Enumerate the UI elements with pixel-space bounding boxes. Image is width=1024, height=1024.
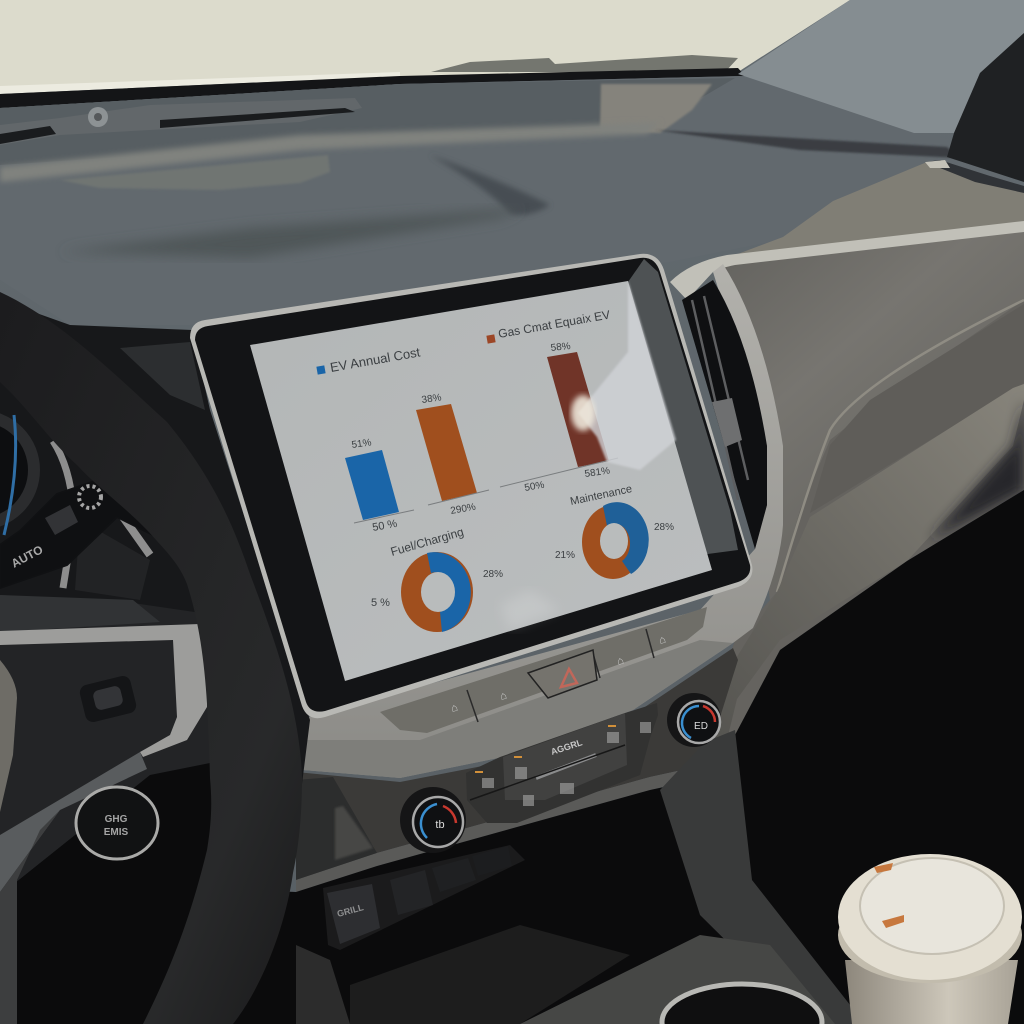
donut: fuel/charging: 28% [483, 569, 503, 580]
turn signal stalk: AUTO [9, 542, 45, 571]
donut: fuel/charging [371, 552, 503, 632]
start button: EMIS [104, 827, 129, 838]
screen buttons row: ⌂ [658, 634, 667, 647]
bar: orange: 38% [421, 392, 442, 406]
bar: orange [416, 392, 489, 517]
upper dashboard surface [0, 76, 1024, 325]
temperature knob right: ED [694, 721, 708, 732]
turn signal stalk [0, 475, 155, 588]
screen buttons row [380, 607, 707, 733]
start button: GHG [105, 814, 128, 825]
coffee cup [838, 854, 1022, 1024]
donut: maintenance: 21% [555, 550, 575, 561]
infotainment bezel [190, 254, 752, 718]
steering wheel lower dark void [0, 740, 220, 1024]
temperature knob left [400, 787, 466, 853]
glare reflection on screen [500, 281, 676, 630]
steering wheel rim [0, 292, 302, 1024]
legend: gas cost: Gas Cmat Equaix EV [497, 307, 611, 341]
legend: EV annual cost: EV Annual Cost [329, 344, 422, 375]
bar: red [500, 341, 618, 494]
bar: blue: 50 % [371, 518, 398, 534]
right upper dash and vent strip [727, 160, 1024, 258]
donut: fuel/charging: 5 % [371, 597, 390, 609]
bar: blue: 51% [351, 437, 372, 451]
donut: maintenance: 28% [654, 522, 674, 533]
screen buttons row: ⌂ [616, 655, 625, 668]
steering wheel spoke [0, 595, 225, 1024]
climate control panel: AGGRL [550, 737, 584, 757]
bar: red: 581% [584, 466, 611, 480]
climate control panel [466, 703, 658, 823]
start button [76, 787, 158, 859]
right pillar [738, 0, 1024, 182]
temperature knob right [667, 693, 721, 747]
left instrument cluster [0, 342, 205, 600]
air vent [682, 280, 767, 549]
bar: red: 50% [524, 480, 545, 494]
donut: maintenance [555, 502, 674, 579]
lower dark cabin area [0, 735, 860, 1024]
silver trim around screen [298, 221, 1024, 778]
center console pillar [660, 730, 865, 1024]
bar: blue [345, 437, 414, 534]
dark hood behind wheel [0, 300, 310, 800]
heading: maintenance: Maintenance [569, 483, 633, 508]
hazard button [528, 650, 597, 698]
heading: fuel/charging: Fuel/Charging [389, 525, 465, 559]
bar: orange: 290% [450, 502, 477, 517]
cup holder tray [520, 935, 835, 1024]
screen display [250, 281, 712, 681]
temperature knob left: tb [435, 819, 445, 831]
lower dark cabin area: GRILL [336, 902, 365, 919]
lower center stack [296, 648, 738, 892]
screen buttons row: ⌂ [499, 690, 508, 703]
defrost vent and sensor [0, 98, 362, 145]
bar: red: 58% [550, 341, 571, 354]
screen buttons row: ⌂ [450, 702, 459, 715]
right trim panel [700, 229, 1024, 1024]
windshield [0, 0, 850, 108]
